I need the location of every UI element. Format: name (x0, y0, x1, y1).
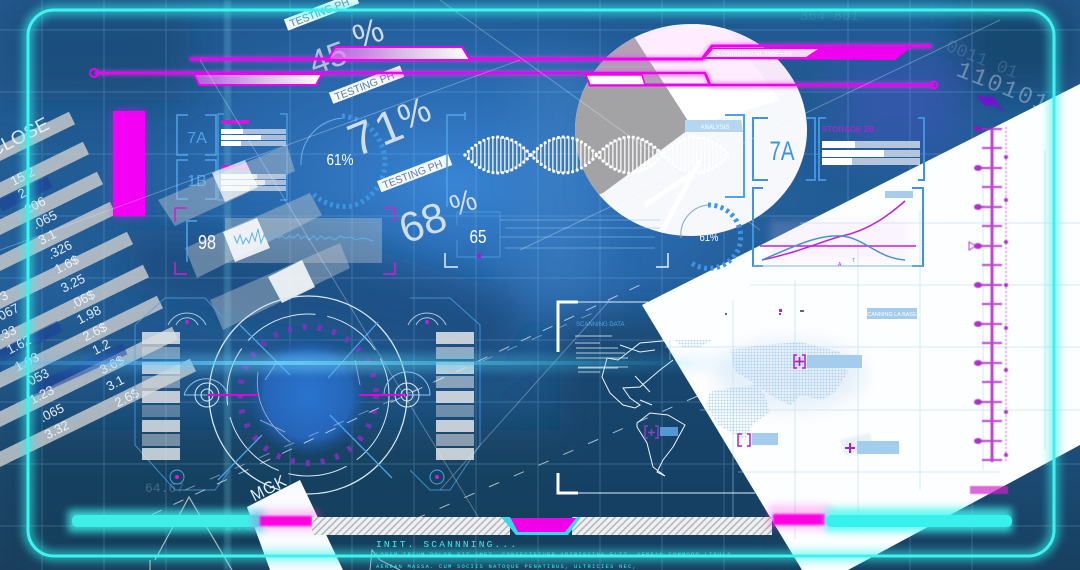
scanning tag: SCANNING LA BASES (864, 312, 921, 318)
vertical light beam (224, 0, 231, 570)
small gauge on circle (681, 205, 741, 268)
left strip table values: 3.32 (42, 417, 71, 442)
panel: 7A data: 7A (770, 136, 794, 166)
right magenta scale (969, 96, 1008, 494)
left button column (142, 332, 180, 460)
magenta pill left (252, 510, 320, 530)
left strip table values: 3.1 (36, 226, 59, 248)
background binary digits (145, 9, 1069, 535)
storage bars (221, 129, 286, 191)
left strip table values: .326 (45, 237, 74, 262)
map: old world dots (675, 340, 875, 455)
DNA helix (465, 137, 729, 173)
background binary digits: 64.67 (145, 481, 184, 496)
scanning text: INIT. SCANNNING... (376, 539, 518, 550)
background binary digits: 2.017 (225, 517, 273, 535)
map markers (645, 308, 921, 454)
panel: line chart: A (838, 262, 842, 268)
white diagonal panel (642, 84, 1080, 570)
scale dots (969, 126, 1008, 457)
horizontal light band (0, 354, 760, 372)
left strip table values: .06$ (68, 286, 98, 312)
centre globe (246, 333, 370, 457)
panel: waveform 98 (175, 208, 395, 274)
scanning text: LOREM IPSUM DOLOR SIT AMET, CONSECTETUER ADIPISCING ELIT. AENEAN COMMODO LIGULA (376, 551, 732, 558)
translucent rotated slabs (158, 145, 382, 330)
scanning tag (864, 308, 921, 319)
left node (184, 379, 228, 407)
testing labels: TESTING PH (333, 70, 396, 103)
left strip table values: 15.2 (8, 164, 37, 189)
panel: 7A data (753, 118, 924, 180)
big percentages: % (348, 11, 389, 57)
magenta header glow (95, 46, 934, 85)
left strip table values: 3.1 (104, 372, 127, 394)
panel: line chart (753, 188, 923, 268)
top arcs left (168, 313, 446, 325)
left strip table values: 2.6$ (80, 319, 110, 344)
left strip table values: 1.03 (12, 349, 41, 374)
left strip table values: .053 (22, 365, 51, 390)
left strip table values: 2 (15, 185, 28, 201)
scale top marker (976, 96, 1005, 113)
bottom hex nodes (170, 470, 184, 484)
magenta trapezoid (505, 518, 578, 532)
bottom status bar (68, 505, 1012, 535)
left strip table values: 3.25 (58, 271, 87, 296)
panel: waveform 98: 98 (198, 232, 216, 254)
right button column (436, 332, 474, 460)
left strip table values: 1.6$ (52, 251, 82, 277)
panel: 7A 1B storage: 1B (187, 173, 207, 190)
scale bottom marker (970, 486, 1008, 494)
left strip table values: 1.62 (4, 332, 33, 357)
white circle (560, 20, 807, 236)
waveform line (234, 229, 373, 244)
big percentages: % (392, 88, 437, 138)
left strip table values: .065 (30, 207, 59, 232)
white stub panel bottom (247, 480, 343, 570)
testing labels: TESTING PH (381, 158, 444, 192)
panel: 7A data: STORAGE 2B (822, 125, 874, 134)
left data strips (0, 118, 193, 469)
big percentages (304, 11, 482, 253)
panel grid on white (665, 150, 1080, 540)
scanning text (376, 539, 732, 570)
gauge 61%: 61% (326, 152, 354, 169)
magenta dot ring (240, 327, 376, 463)
magenta block (113, 110, 145, 217)
small gauge on circle: 61% (700, 232, 719, 244)
analysis tag (685, 120, 743, 132)
big percentages: 68 (393, 192, 453, 253)
magenta pill right (768, 505, 830, 529)
magenta header lines (90, 46, 938, 88)
left strip table values: 1.2 (90, 336, 113, 358)
hex outlines (135, 298, 480, 490)
scanning text: AENEAN MASSA. CUM SOCIIS NATOQUE PENATIBUS, ULTRICIES NEC, (376, 563, 637, 570)
right node (384, 372, 430, 407)
cyan bar left (68, 510, 264, 532)
map frame: SCANNING DATA (576, 322, 624, 328)
map frame (558, 302, 755, 493)
radar HUD: MGK (247, 471, 290, 505)
left strip table values: 1.98 (74, 302, 103, 327)
big percentages: 71 (340, 97, 413, 166)
grey wedge in circle (575, 38, 688, 194)
left strip table values: 3.6$ (97, 352, 127, 377)
testing labels (284, 0, 453, 193)
dark blue strip gaps (0, 182, 125, 392)
inner segmented ring (227, 314, 389, 476)
lower pill (194, 74, 322, 85)
outer ring (209, 296, 407, 494)
big percentages: % (445, 183, 482, 223)
map text block (575, 336, 628, 372)
magenta header lines: 4.056668603B.396E+99 (716, 51, 792, 58)
panel: DNA helix bracket: 65 (470, 227, 486, 247)
panel: 7A 1B storage: 7A (187, 130, 207, 147)
map: Americas outline (602, 340, 685, 476)
gauge 61% (301, 116, 385, 207)
globe fragments (257, 360, 360, 442)
white pill (586, 75, 645, 85)
left strip table values: 206 (22, 193, 48, 217)
radar HUD (135, 296, 480, 505)
top-right header block (700, 48, 910, 60)
big percentages: 45 (304, 34, 353, 83)
7A bars (822, 141, 920, 165)
left strip table values: .065 (37, 400, 66, 425)
cyan bar right (826, 508, 1012, 532)
left strip table values: 2.6$ (112, 385, 142, 410)
crosshair lines (218, 322, 392, 480)
panel: line chart: T (852, 258, 855, 264)
panel: DNA helix bracket (445, 112, 744, 267)
background binary digits: 1101010 (952, 57, 1069, 125)
top pill (328, 47, 470, 60)
left strip table values: 1.23 (27, 382, 56, 407)
panel: 7A 1B storage (177, 114, 287, 200)
striped bar (312, 517, 510, 535)
chart tag (885, 191, 913, 198)
left strip table values (0, 114, 142, 442)
background binary digits: 364 801 (800, 9, 859, 25)
background binary digits: 0011 01 (943, 37, 1020, 84)
analysis tag: ANALYSIS (701, 125, 729, 131)
